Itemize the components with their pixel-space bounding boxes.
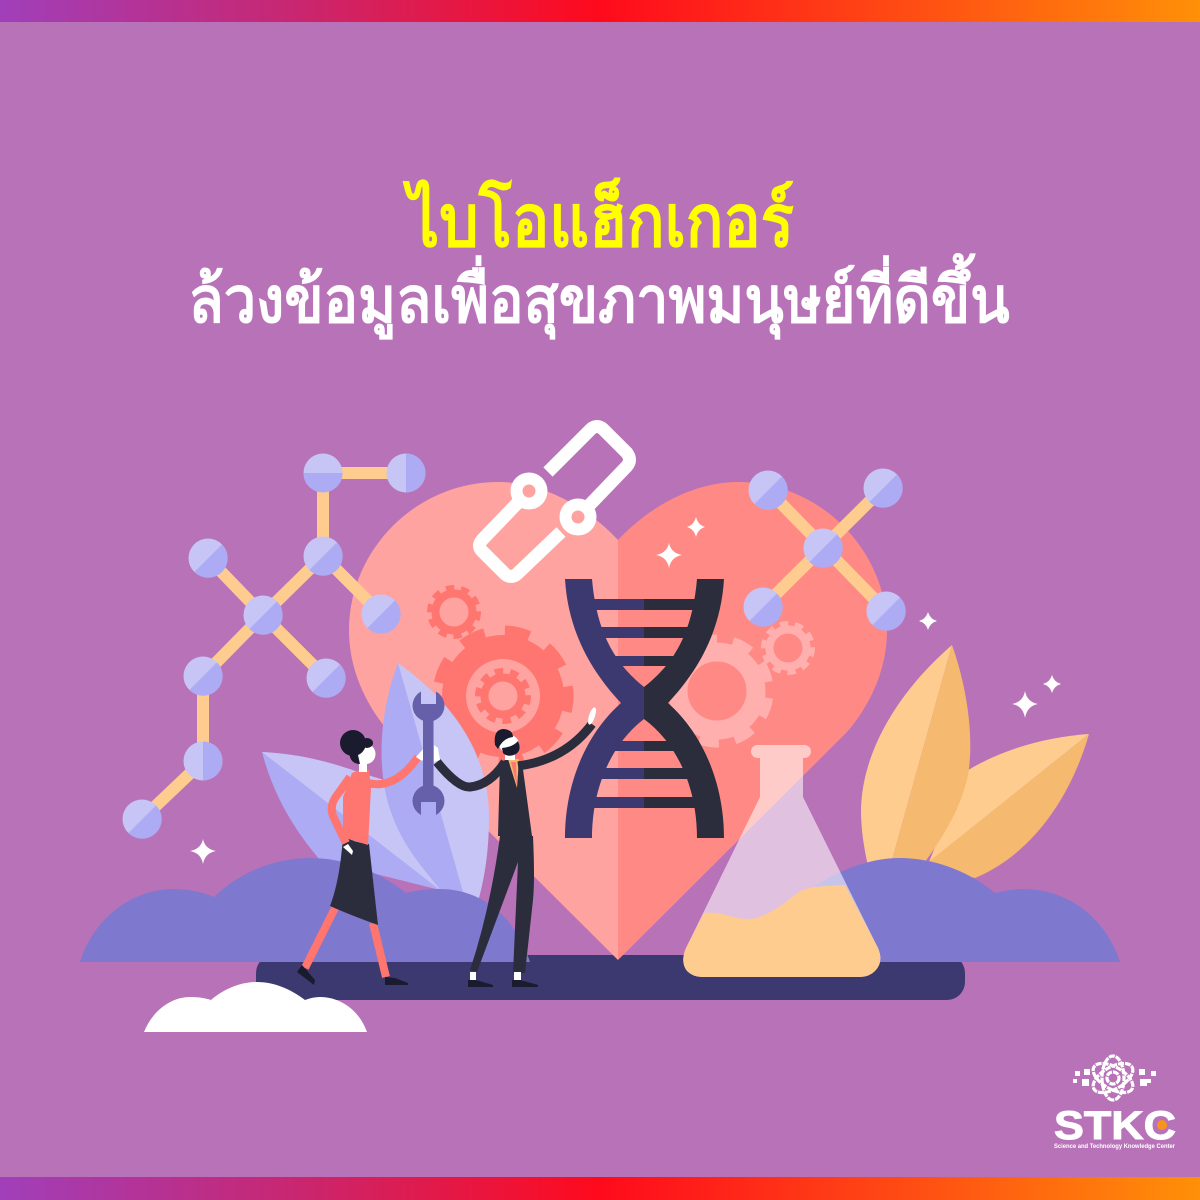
white cloud: [144, 982, 367, 1032]
molecule: right: [744, 468, 906, 631]
sparkles: [190, 517, 1061, 864]
person: woman: [297, 730, 426, 985]
hills: right: [815, 858, 1120, 962]
gear: large right: [658, 632, 776, 750]
leaves: lilac left: [262, 663, 489, 900]
logo: STKC: [1054, 1056, 1176, 1150]
platform base: [256, 955, 965, 1000]
title: ไบโอแฮ็กเกอร์: [403, 177, 794, 262]
logo orange dot: [1157, 1120, 1167, 1130]
top gradient bar: [0, 0, 1200, 22]
flask: [683, 745, 880, 977]
gear: large centre: [430, 623, 576, 769]
gear: small right: [764, 624, 812, 672]
DNA double helix: [565, 579, 724, 838]
hills: left: [80, 858, 530, 962]
logo wordmark: STKC: [1054, 1104, 1176, 1148]
leaves: orange right: [861, 645, 1089, 878]
molecule: left: [122, 454, 426, 839]
icon: wrench: [413, 692, 444, 815]
subtitle: ล้วงข้อมูลเพื่อสุขภาพมนุษย์ที่ดีขึ้น: [188, 254, 1010, 340]
logo tagline: Science and Technology Knowledge Center: [1054, 1144, 1176, 1150]
logo pixel squares: [1073, 1069, 1156, 1086]
logo icon: atom: [1088, 1056, 1138, 1100]
person: man: [434, 707, 598, 987]
bottom gradient bar: [0, 1177, 1200, 1200]
icon: chain link: [480, 426, 630, 576]
heart: [349, 482, 887, 960]
gear: small top left: [430, 588, 478, 636]
